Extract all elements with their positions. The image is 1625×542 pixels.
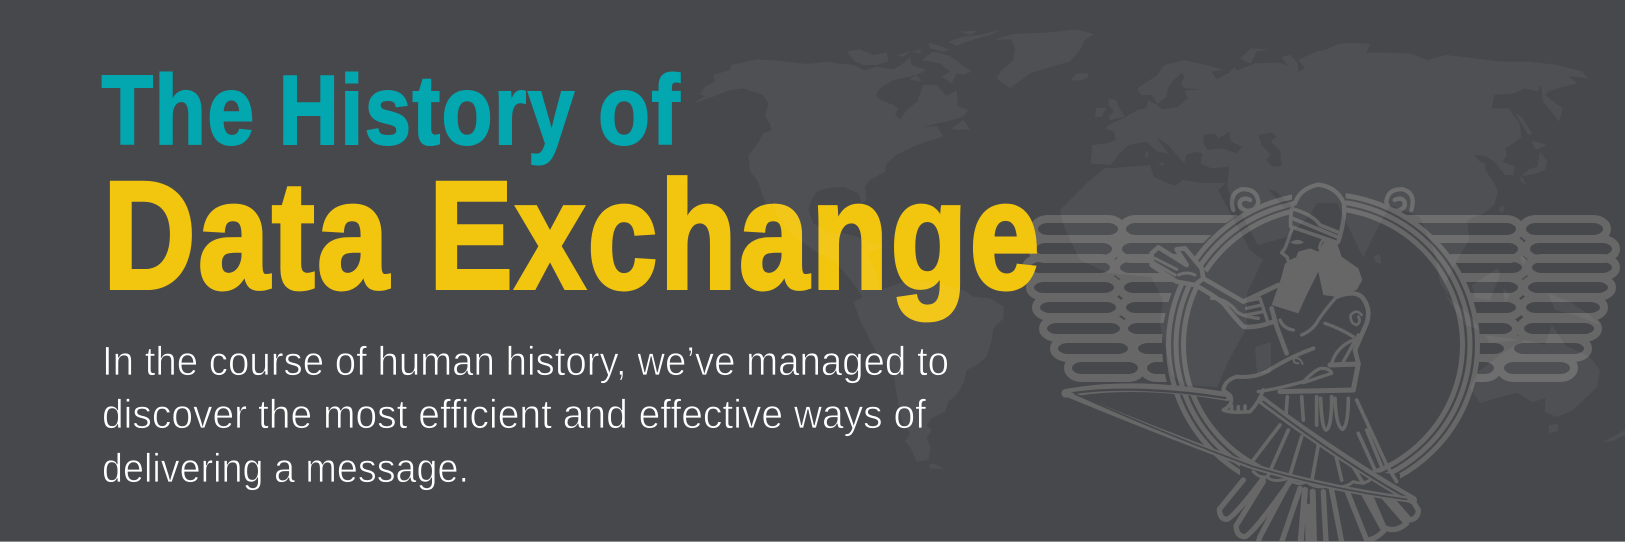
head and scrolls bbox=[1232, 185, 1413, 313]
raised arm and hand bbox=[1152, 247, 1278, 327]
scrolls at top of ring bbox=[1232, 189, 1413, 211]
australia bbox=[1470, 325, 1600, 417]
body and arms bbox=[1152, 247, 1368, 412]
title line 1: The bbox=[102, 55, 256, 165]
right wing feathers bbox=[1390, 219, 1616, 378]
southeast asia islands bbox=[1445, 255, 1600, 343]
south america bbox=[853, 280, 1004, 469]
description text: In the course of human history, we’ve managed to bbox=[102, 338, 949, 384]
africa bbox=[1060, 165, 1263, 387]
ring bbox=[1168, 194, 1478, 496]
emblem: Assyrian winged figure bbox=[1026, 185, 1616, 542]
description text: discover the most efficient and effective ways of bbox=[102, 391, 927, 437]
bottom edge line bbox=[0, 541, 1625, 542]
title line 2: Data bbox=[103, 150, 391, 321]
bow bbox=[1066, 388, 1413, 500]
skirt pleats bbox=[1253, 397, 1397, 483]
title line 1 bbox=[102, 55, 681, 165]
forearm, hand on bow and belt bbox=[1223, 348, 1358, 412]
description text: delivering a message. bbox=[102, 445, 469, 491]
torso and rear arm bbox=[1272, 293, 1368, 363]
title line 1: of bbox=[598, 55, 681, 165]
title line 2: Exchange bbox=[429, 150, 1042, 321]
greenland bbox=[995, 29, 1094, 88]
north and central america bbox=[693, 29, 1002, 303]
left wing feathers bbox=[1026, 219, 1247, 378]
world map overlay bbox=[693, 29, 1625, 469]
tasmania and new zealand bbox=[1549, 424, 1625, 442]
tail feathers bbox=[1219, 472, 1418, 542]
madagascar and sri lanka bbox=[1255, 254, 1381, 373]
title line 2 bbox=[103, 150, 1042, 321]
title line 1: History bbox=[278, 55, 576, 165]
head and beard bbox=[1272, 230, 1362, 313]
eurasia and islands bbox=[1071, 43, 1588, 297]
helmet bbox=[1291, 185, 1344, 243]
description text bbox=[102, 338, 949, 491]
